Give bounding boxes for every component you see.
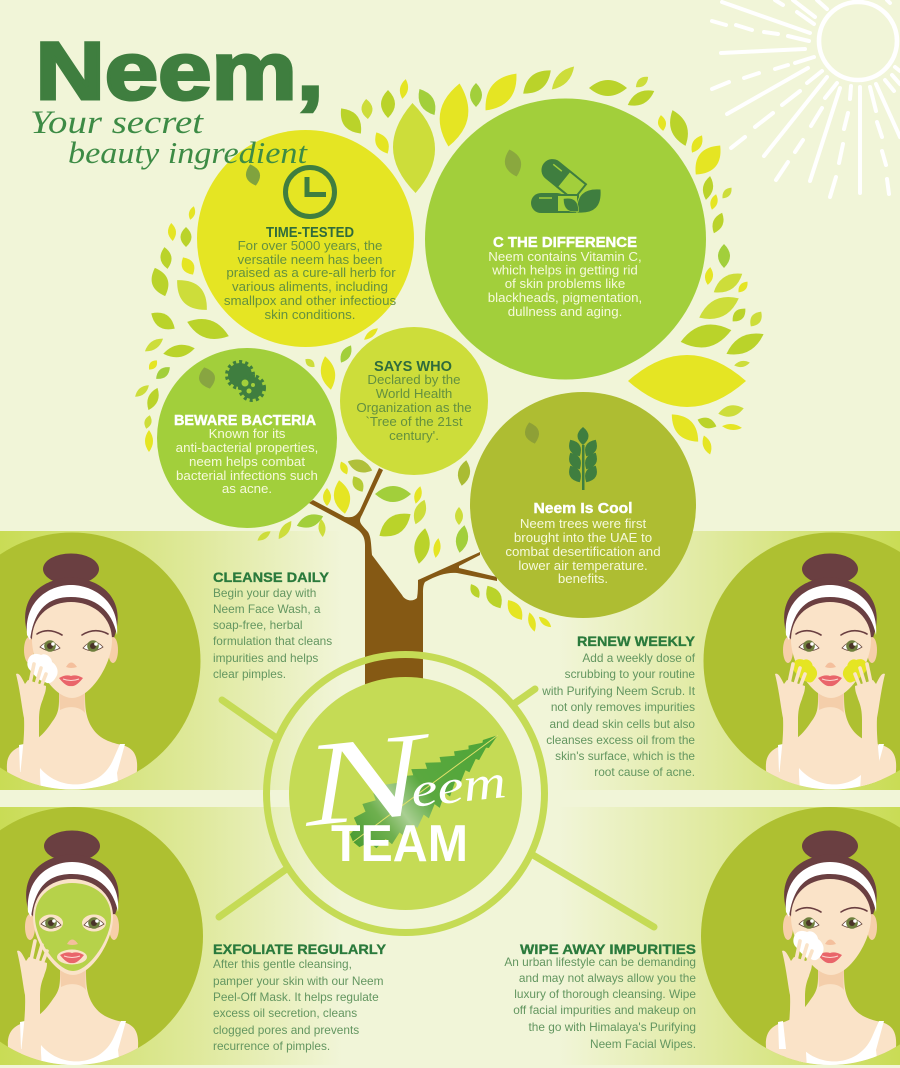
text: renew weekly: cleanses excess oil from the (546, 733, 695, 747)
text: wipe away impurities: and may not always allow you the (519, 971, 696, 985)
panel: beware bacteria: Known for its (209, 426, 286, 441)
panel: says who: century'. (389, 428, 439, 443)
neem team badge (266, 654, 544, 932)
text: wipe away impurities: An urban lifestyle can be demanding (504, 955, 696, 969)
icon: capsules and leaf (531, 155, 608, 220)
panel: says who: Declared by the (367, 372, 461, 387)
text: wipe away impurities: off facial impurities and makeup on (513, 1003, 696, 1017)
text: exfoliate regularly (213, 941, 387, 1053)
panel: time-tested: various aliments, including (232, 279, 388, 294)
icon: neem leaf (337, 713, 514, 864)
panel: time-tested: skin conditions. (265, 307, 355, 322)
panel: face circle cleanse (0, 532, 200, 800)
panel: beware bacteria: as acne. (222, 481, 272, 496)
text: exfoliate regularly: pamper your skin with our Neem (213, 974, 384, 988)
text: renew weekly: with Purifying Neem Scrub. It (541, 684, 696, 698)
wordmark: TEAM: TEAM (331, 815, 468, 873)
panel: time-tested: praised as a cure-all herb for (226, 265, 396, 280)
panel: says who: World Health (376, 386, 452, 401)
band: lower gradient (0, 807, 900, 1065)
text: exfoliate regularly: excess oil secretion, cleans (213, 1006, 357, 1020)
panel: beware bacteria: neem helps combat (189, 454, 305, 469)
panel: c the difference: C THE DIFFERENCE (493, 235, 637, 251)
text: renew weekly: and dead skin cells but also (549, 717, 695, 731)
tree leaves (133, 63, 767, 633)
icon: bacteria (227, 362, 264, 400)
wordmark: Neem script: eem (408, 755, 508, 818)
panel: neem is cool: benefits. (558, 571, 608, 586)
panel: beware bacteria: bacterial infections such (176, 468, 318, 483)
panel: c the difference: of skin problems like (505, 276, 625, 291)
band: upper gradient (0, 531, 900, 790)
panel: time-tested: versatile neem has been (238, 252, 382, 267)
panel: c the difference (425, 98, 706, 380)
panel: says who (340, 327, 488, 475)
text: renew weekly: not only removes impurities (551, 700, 695, 714)
text: wipe away impurities: the go with Himalaya's Purifying (528, 1020, 696, 1034)
text: cleanse daily: Begin your day with (213, 586, 316, 600)
text: wipe away impurities (504, 941, 696, 1051)
text: wipe away impurities: Neem Facial Wipes. (590, 1037, 696, 1051)
panel: time-tested: For over 5000 years, the (238, 238, 382, 253)
text: exfoliate regularly: Peel-Off Mask. It helps regulate (213, 990, 379, 1004)
text: wipe away impurities: WIPE AWAY IMPURITIES (520, 941, 696, 957)
panel: neem is cool: combat desertification and (505, 544, 661, 559)
panel: neem is cool: Neem trees were first (520, 516, 646, 531)
panel: neem is cool: brought into the UAE to (514, 530, 652, 545)
wordmark: Neem script: N (294, 706, 440, 852)
panel: neem is cool (470, 392, 696, 618)
panel: neem is cool: lower air temperature. (518, 558, 648, 573)
text: cleanse daily: impurities and helps (213, 651, 318, 665)
icon: wheat (565, 427, 601, 490)
panel: c the difference: blackheads, pigmentation, (488, 290, 642, 305)
panel: c the difference: which helps in getting rid (491, 262, 638, 278)
text: exfoliate regularly: recurrence of pimples. (213, 1039, 330, 1053)
panel: says who: Organization as the (356, 400, 472, 415)
tree trunk and branches (309, 468, 497, 690)
title: Neem: Neem, (36, 26, 324, 117)
panel: beware bacteria (157, 348, 337, 528)
text: cleanse daily: Neem Face Wash, a (213, 602, 321, 616)
panel: face circle renew (704, 532, 900, 800)
panel: c the difference: dullness and aging. (508, 304, 622, 319)
text: cleanse daily: formulation that cleans (213, 634, 332, 648)
panel: c the difference: Neem contains Vitamin C, (488, 249, 642, 264)
text: renew weekly: RENEW WEEKLY (577, 633, 696, 649)
panel: says who: `Tree of the 21st (365, 414, 463, 429)
panel: beware bacteria: BEWARE BACTERIA (174, 413, 317, 429)
text: renew weekly: root cause of acne. (594, 765, 695, 779)
panel: beware bacteria: anti-bacterial properties, (176, 440, 318, 455)
panel: time-tested (197, 130, 414, 347)
text: cleanse daily: clear pimples. (213, 667, 286, 681)
text: cleanse daily: CLEANSE DAILY (213, 569, 330, 585)
text: renew weekly: scrubbing to your routine (565, 667, 695, 681)
connector spokes (219, 689, 654, 927)
panel: says who: SAYS WHO (374, 359, 452, 375)
text: cleanse daily: soap-free, herbal (213, 618, 303, 632)
panel: time-tested: TIME-TESTED (266, 225, 354, 241)
text: exfoliate regularly: clogged pores and prevents (213, 1023, 359, 1037)
text: exfoliate regularly: EXFOLIATE REGULARLY (213, 941, 387, 957)
text: renew weekly: Add a weekly dose of (582, 651, 696, 665)
text: renew weekly (541, 633, 696, 779)
subtitle: your secret beauty ingredient: beauty ingredient (68, 135, 309, 170)
panel: face circle wipe (701, 807, 900, 1068)
text: cleanse daily (213, 569, 332, 681)
text: renew weekly: skin's surface, which is the (555, 749, 695, 763)
icon: sun (712, 0, 900, 197)
text: wipe away impurities: luxury of thorough cleansing. Wipe (514, 987, 696, 1001)
panel: neem is cool: Neem Is Cool (534, 501, 632, 517)
subtitle: your secret beauty ingredient: Your secret (30, 105, 204, 141)
icon: clock (286, 168, 334, 216)
panel: face circle exfoliate (0, 807, 203, 1068)
panel: time-tested: smallpox and other infectious (224, 293, 396, 308)
text: exfoliate regularly: After this gentle cleansing, (213, 957, 352, 971)
